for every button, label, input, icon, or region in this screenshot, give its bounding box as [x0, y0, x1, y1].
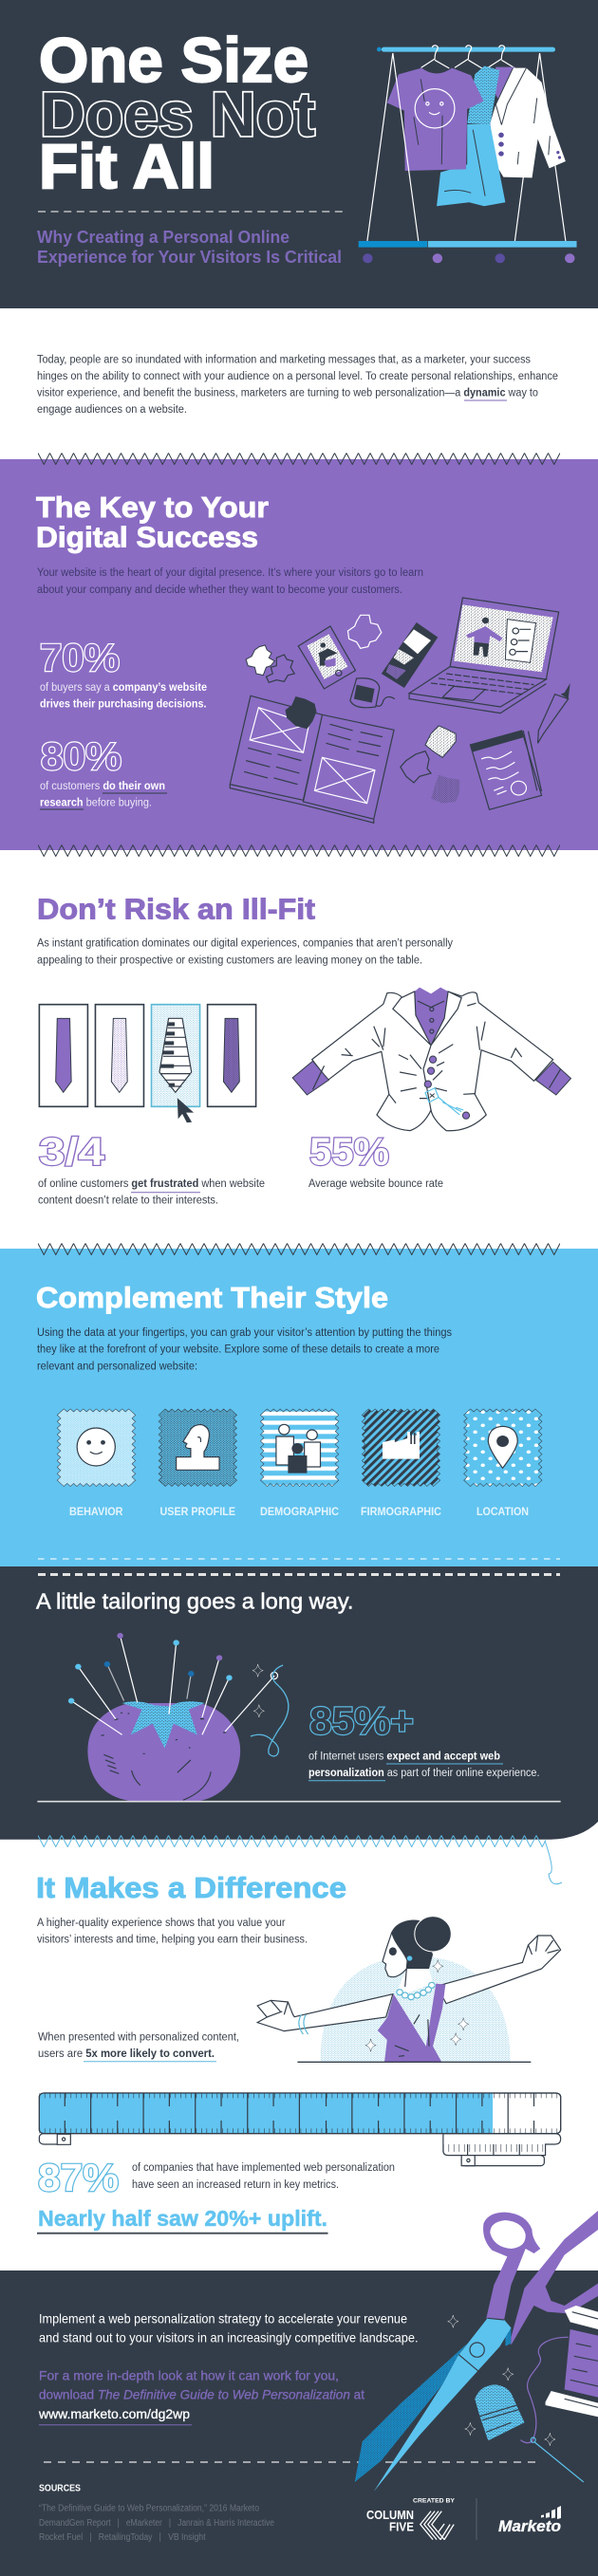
logo: Column Five: COLUMN	[366, 2508, 414, 2522]
stat: 3/4: of online customers get frustrated when website	[38, 1178, 265, 1190]
text block: As instant gratification dominates our digital experiences, companies that aren’t personally	[37, 938, 453, 950]
logo: Column Five: FIVE	[389, 2520, 414, 2534]
icon labels: DEMOGRAPHIC	[260, 1505, 339, 1518]
notepad	[470, 731, 542, 809]
stat: 87%: 87%	[38, 2156, 119, 2199]
text block: sources	[39, 2483, 274, 2543]
stat: 55%: 55%	[309, 1130, 389, 1174]
title: Fit All	[39, 131, 215, 201]
illustration: ties	[39, 1005, 256, 1122]
stat: 87%: have seen an increased return in key metrics.	[132, 2179, 339, 2191]
text block: sources: SOURCES	[39, 2483, 81, 2494]
icon: location	[464, 1409, 542, 1487]
stat: 85%+: 85%+	[309, 1699, 414, 1743]
illustration: scissors, thimble and spool	[355, 2211, 598, 2492]
text block: 5x: users are 5x more likely to convert.	[38, 2048, 215, 2060]
stat: 80%: 80%	[41, 734, 121, 778]
subtitle: Why Creating a Personal Online	[37, 228, 290, 247]
text block: intro: hinges on the ability to connect with your audience on a personal level. To create personal relationships, enhance	[37, 371, 558, 382]
panel: header	[0, 0, 598, 308]
text block: 5x	[38, 2032, 239, 2062]
fabric patches	[246, 615, 459, 804]
illustration: woman	[257, 1917, 561, 2062]
text block	[37, 938, 453, 966]
text block: appealing to their prospective or existing customers are leaving money on the table.	[37, 954, 422, 966]
callout: uplift: Nearly half saw 20%+ uplift.	[38, 2206, 327, 2231]
stat: 85%+: personalization as part of their online experience.	[308, 1768, 539, 1779]
logo: Column Five: CREATED BY	[413, 2498, 456, 2505]
text block: 5x: When presented with personalized content,	[38, 2032, 239, 2044]
text block	[37, 567, 423, 596]
icon labels: FIRMOGRAPHIC	[361, 1505, 441, 1518]
pen	[538, 683, 570, 743]
illustration: ill-fitting jacket	[292, 988, 570, 1131]
laptop	[409, 598, 559, 713]
text block: visitors’ interests and time, helping you earn their business.	[37, 1934, 308, 1945]
text block: intro: visitor experience, and benefit the business, marketers are turning to web personalization—a dynamic way to	[37, 388, 538, 399]
heading	[36, 491, 269, 554]
text block: Using the data at your fingertips, you can grab your visitor’s attention by putting the things	[37, 1327, 452, 1339]
stat: 87%: of companies that have implemented web personalization	[132, 2162, 395, 2174]
icon labels: USER PROFILE	[159, 1505, 235, 1518]
text block	[37, 1918, 308, 1945]
icon swatches	[57, 1409, 542, 1487]
text block: sources: Rocket Fuel | RetailingToday | VB Insight	[39, 2532, 206, 2543]
panel: don't risk an ill-fit	[37, 892, 570, 1207]
illustration: digital devices and fabric	[230, 598, 570, 823]
text block: sources: DemandGen Report | eMarketer | Janrain & Harris Interactive	[39, 2518, 274, 2529]
stat: 55%: Average website bounce rate	[308, 1178, 443, 1190]
blue stitching	[38, 1835, 562, 1884]
title	[39, 25, 315, 201]
stat: 70%: 70%	[40, 636, 120, 679]
icon labels: LOCATION	[477, 1505, 529, 1518]
panel: it makes a difference	[36, 1871, 561, 2233]
text block	[37, 1327, 452, 1372]
text block: call to action: Implement a web personalization strategy to accelerate your revenue	[39, 2311, 407, 2326]
text block: download link: www.marketo.com/dg2wp	[38, 2406, 190, 2421]
thread spool	[350, 678, 395, 708]
stat: 3/4	[38, 1130, 265, 1207]
text block: sources: “The Definitive Guide to Web Personalization,” 2016 Marketo	[39, 2504, 259, 2514]
text block: relevant and personalized website:	[37, 1361, 197, 1372]
text block: intro: Today, people are so inundated with information and marketing messages that, as a marketer, your success	[37, 355, 531, 366]
open book	[230, 695, 394, 823]
text block: about your company and decide whether they want to become your customers.	[37, 584, 402, 596]
stat: 3/4: content doesn’t relate to their interests.	[38, 1195, 218, 1207]
heading: Digital Success	[36, 521, 258, 554]
logo: Marketo	[498, 2506, 561, 2535]
illustration: pin cushion	[37, 1633, 561, 1802]
text block: they like at the forefront of your website. Explore some of these details to create a more	[37, 1344, 439, 1356]
stat: 70%: of buyers say a company’s website	[40, 682, 207, 694]
title: Does Not	[40, 79, 315, 149]
stat: 70%: drives their purchasing decisions.	[40, 699, 207, 711]
icon: demographic	[260, 1409, 339, 1487]
stat: 3/4: 3/4	[39, 1130, 104, 1174]
panel: a little tailoring	[0, 1566, 598, 1840]
subtitle: Experience for Your Visitors Is Critical	[37, 248, 342, 267]
heading: Complement Their Style	[36, 1281, 388, 1314]
stat: 80%	[40, 734, 167, 809]
text block: A higher-quality experience shows that you value your	[37, 1918, 286, 1929]
illustration: measuring tape	[39, 2093, 561, 2166]
text block: Your website is the heart of your digital presence. It’s where your visitors go to learn	[37, 567, 423, 579]
stat: 70%	[40, 636, 207, 711]
logo: Column Five	[366, 2498, 477, 2540]
panel: complement their style	[0, 1243, 598, 1566]
text block: download link: download The Definitive Guide to Web Personalization at	[39, 2387, 364, 2402]
icon labels: BEHAVIOR	[69, 1505, 123, 1518]
text block: intro: engage audiences on a website.	[37, 404, 187, 416]
text block: call to action: and stand out to your visitors in an increasingly competitive landscape.	[39, 2330, 418, 2345]
icon: cursor	[178, 1098, 194, 1122]
panel: the key to your digital success	[0, 453, 598, 857]
logo: Marketo: Marketo	[498, 2517, 561, 2535]
phone	[382, 622, 438, 688]
tablet	[298, 626, 355, 689]
heading: A little tailoring goes a long way.	[36, 1589, 353, 1614]
text block: download link	[38, 2368, 364, 2425]
icon labels	[69, 1505, 529, 1518]
stat: 87%	[38, 2156, 395, 2199]
panel: footer	[0, 2211, 598, 2576]
stat: 85%+	[308, 1699, 539, 1781]
stat: 55%	[308, 1130, 443, 1190]
illustration: clothing rack	[359, 46, 577, 263]
title: One Size	[39, 25, 308, 95]
text block: call to action	[39, 2311, 418, 2345]
text block: intro	[37, 355, 558, 416]
heading: It Makes a Difference	[36, 1871, 346, 1904]
icon: user profile	[159, 1409, 237, 1487]
text block: download link: For a more in-depth look at how it can work for you,	[39, 2368, 339, 2383]
icon: firmographic	[362, 1409, 440, 1487]
stat: 85%+: of Internet users expect and accept web	[308, 1751, 500, 1762]
heading: Don’t Risk an Ill-Fit	[37, 892, 315, 925]
stat: 80%: of customers do their own	[40, 781, 165, 792]
stat: 80%: research before buying.	[40, 797, 152, 808]
subtitle	[37, 228, 342, 267]
heading: The Key to Your	[36, 491, 269, 524]
icon: behavior	[57, 1409, 136, 1487]
